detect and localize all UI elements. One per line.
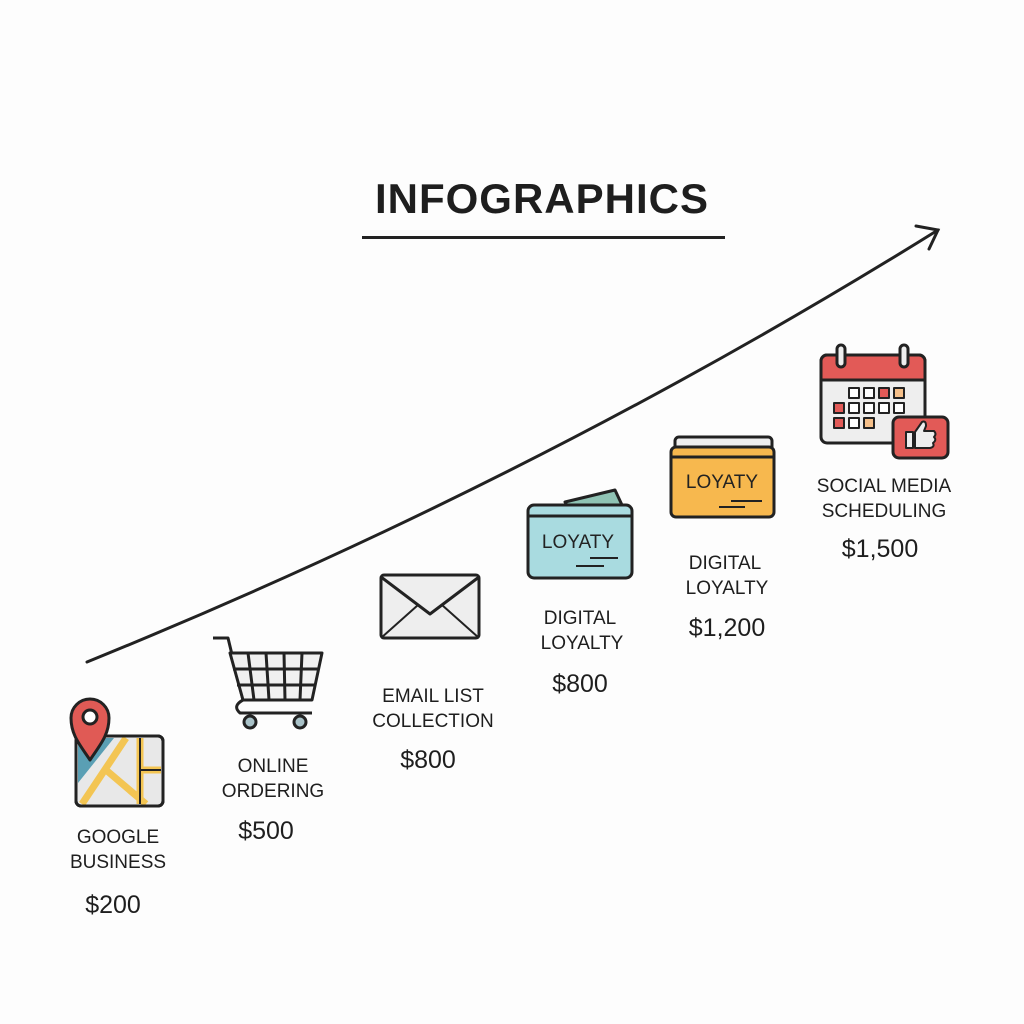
title: INFOGRAPHICS	[375, 175, 709, 222]
title	[362, 175, 725, 239]
label: digital loyalty 1	[541, 608, 624, 698]
label: email list collection	[372, 686, 494, 774]
label: google business: $200	[85, 891, 141, 919]
label: online ordering: ONLINE	[238, 756, 308, 777]
label: digital loyalty 2: DIGITAL	[689, 553, 761, 574]
label: digital loyalty 1: LOYALTY	[541, 633, 624, 654]
label: online ordering	[222, 756, 324, 845]
label: online ordering: ORDERING	[222, 781, 324, 802]
label: digital loyalty 1: DIGITAL	[544, 608, 616, 629]
label: online ordering: $500	[238, 817, 294, 845]
label: social media scheduling: SOCIAL MEDIA	[817, 476, 952, 497]
label: email list collection: EMAIL LIST	[382, 686, 484, 707]
label: google business: GOOGLE	[77, 827, 159, 848]
label: social media scheduling: SCHEDULING	[822, 501, 946, 522]
arrow: growth trend	[87, 226, 938, 662]
label: digital loyalty 2	[686, 553, 769, 642]
label: google business	[70, 827, 166, 919]
label: social media scheduling	[817, 476, 952, 563]
label: email list collection: $800	[400, 746, 456, 774]
label: digital loyalty 1: $800	[552, 670, 608, 698]
label: google business: BUSINESS	[70, 852, 166, 873]
label: digital loyalty 2: $1,200	[689, 614, 765, 642]
icon: google map pin	[71, 699, 163, 806]
icon: calendar with thumbs up	[821, 345, 948, 458]
icon: shopping cart	[213, 638, 322, 728]
label: digital loyalty 2: LOYALTY	[686, 578, 769, 599]
icon: orange loyalty card	[671, 437, 774, 517]
icon: orange loyalty card: LOYATY	[686, 472, 758, 493]
icon: teal loyalty card: LOYATY	[542, 532, 614, 553]
label: email list collection: COLLECTION	[372, 711, 494, 732]
icon: teal loyalty card	[528, 490, 632, 578]
label: social media scheduling: $1,500	[842, 535, 918, 563]
icon: envelope	[381, 575, 479, 638]
